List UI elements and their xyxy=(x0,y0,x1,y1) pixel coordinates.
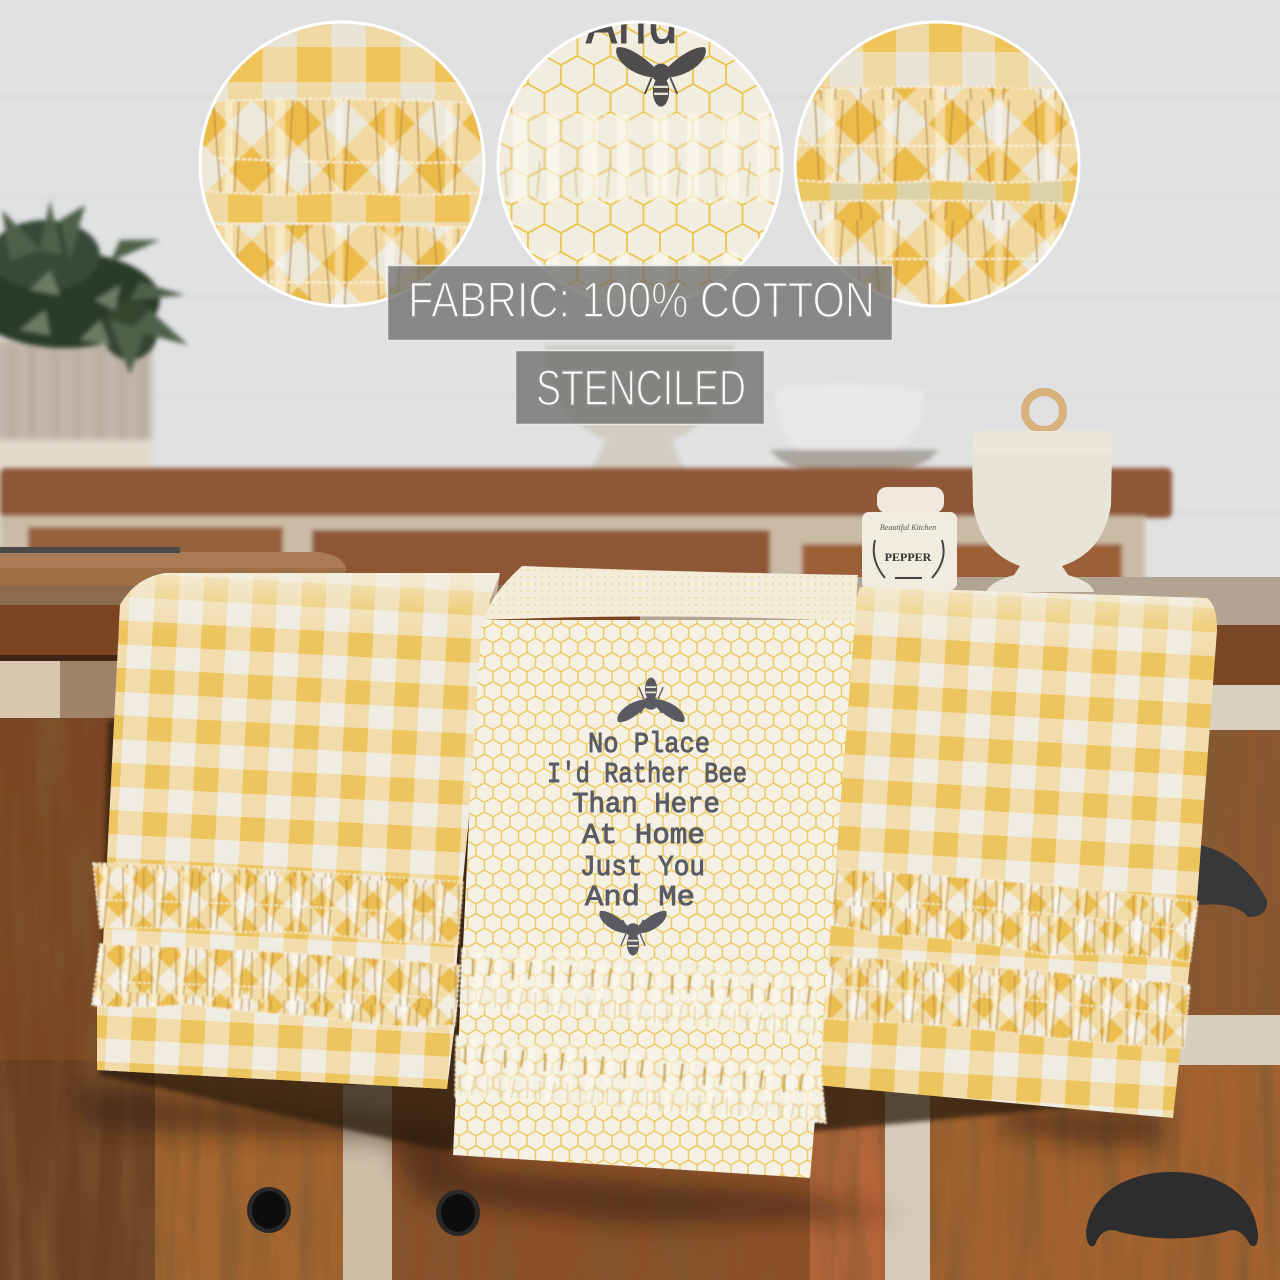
left ruffles xyxy=(92,863,463,1026)
detail circle: honeycomb with bee xyxy=(496,20,784,304)
label: stenciled: STENCILED xyxy=(536,360,746,416)
cabinet hardware xyxy=(247,843,1267,1246)
background: shiplap wall xyxy=(0,0,1280,640)
detail circle: right gingham xyxy=(794,20,1080,308)
cup pull right xyxy=(1190,843,1267,917)
detail circle: left gingham xyxy=(198,20,486,308)
cream trim xyxy=(0,661,1280,1280)
label: fabric: FABRIC: 100% COTTON xyxy=(408,272,875,328)
folded dotted top xyxy=(484,566,858,622)
stenciled saying xyxy=(547,728,747,914)
cutting board xyxy=(0,547,346,586)
centre ruffles xyxy=(455,948,826,1123)
pepper shaker: PEPPER xyxy=(885,550,932,564)
large bee xyxy=(616,47,706,107)
towel: centre honeycomb xyxy=(453,566,858,1178)
label: stenciled xyxy=(516,350,764,424)
bee top xyxy=(617,678,685,722)
cup pull bottom xyxy=(1086,1172,1258,1246)
potted plant xyxy=(0,200,188,468)
sideboard shelf xyxy=(0,468,1172,590)
stenciled saying: And Me xyxy=(585,881,695,914)
pepper shaker: Beautiful Kitchen xyxy=(880,523,936,532)
stenciled saying: Than Here xyxy=(572,788,720,821)
towel: left gingham xyxy=(92,573,500,1089)
jar with lid xyxy=(972,392,1112,592)
stenciled saying: At Home xyxy=(582,819,705,852)
stenciled saying: No Place xyxy=(588,728,710,761)
right ruffles xyxy=(815,868,1198,1048)
stenciled saying: Just You xyxy=(580,851,705,884)
knob left xyxy=(247,1187,291,1233)
bee bottom xyxy=(599,911,667,955)
pepper shaker xyxy=(862,487,957,590)
label: fabric xyxy=(388,266,892,340)
towel: right gingham xyxy=(815,587,1217,1118)
stenciled saying: I'd Rather Bee xyxy=(547,758,747,791)
knob right xyxy=(436,1190,480,1236)
towel shadows xyxy=(100,720,1150,1150)
bowls on shelf xyxy=(545,345,938,476)
wood counter and cabinet xyxy=(0,577,1280,1280)
